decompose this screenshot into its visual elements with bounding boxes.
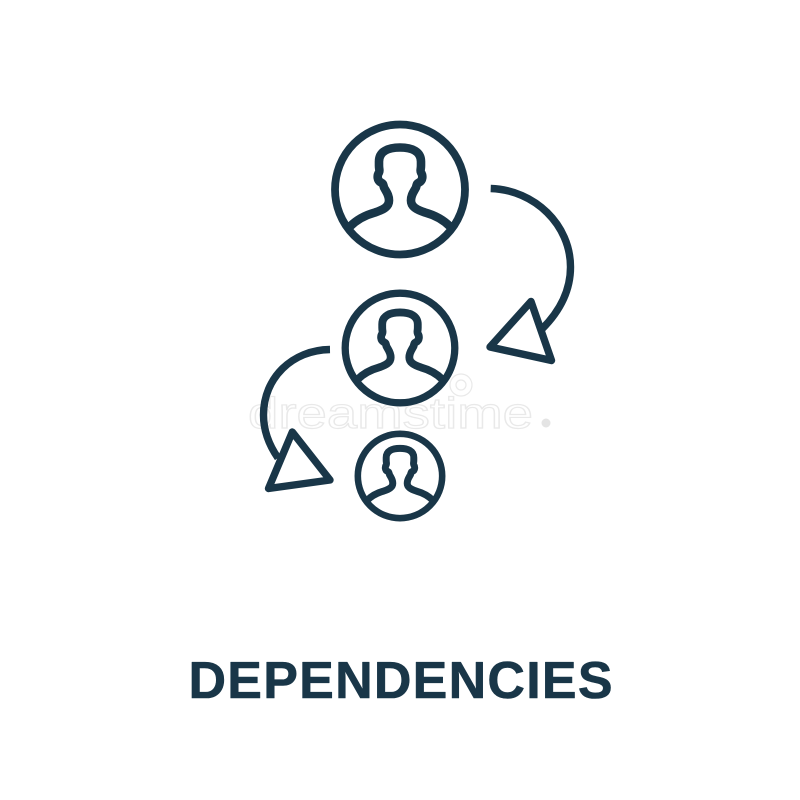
arrow: top person to middle person <box>490 188 570 360</box>
title: DEPENDENCIES <box>188 652 612 710</box>
icon: top person in circle <box>335 124 465 254</box>
icon: middle person in circle <box>345 293 455 403</box>
icon: bottom person in circle <box>358 434 442 518</box>
watermark: dreamstime <box>248 389 533 438</box>
watermark <box>248 374 550 438</box>
arrow: middle person to bottom person <box>264 350 330 488</box>
